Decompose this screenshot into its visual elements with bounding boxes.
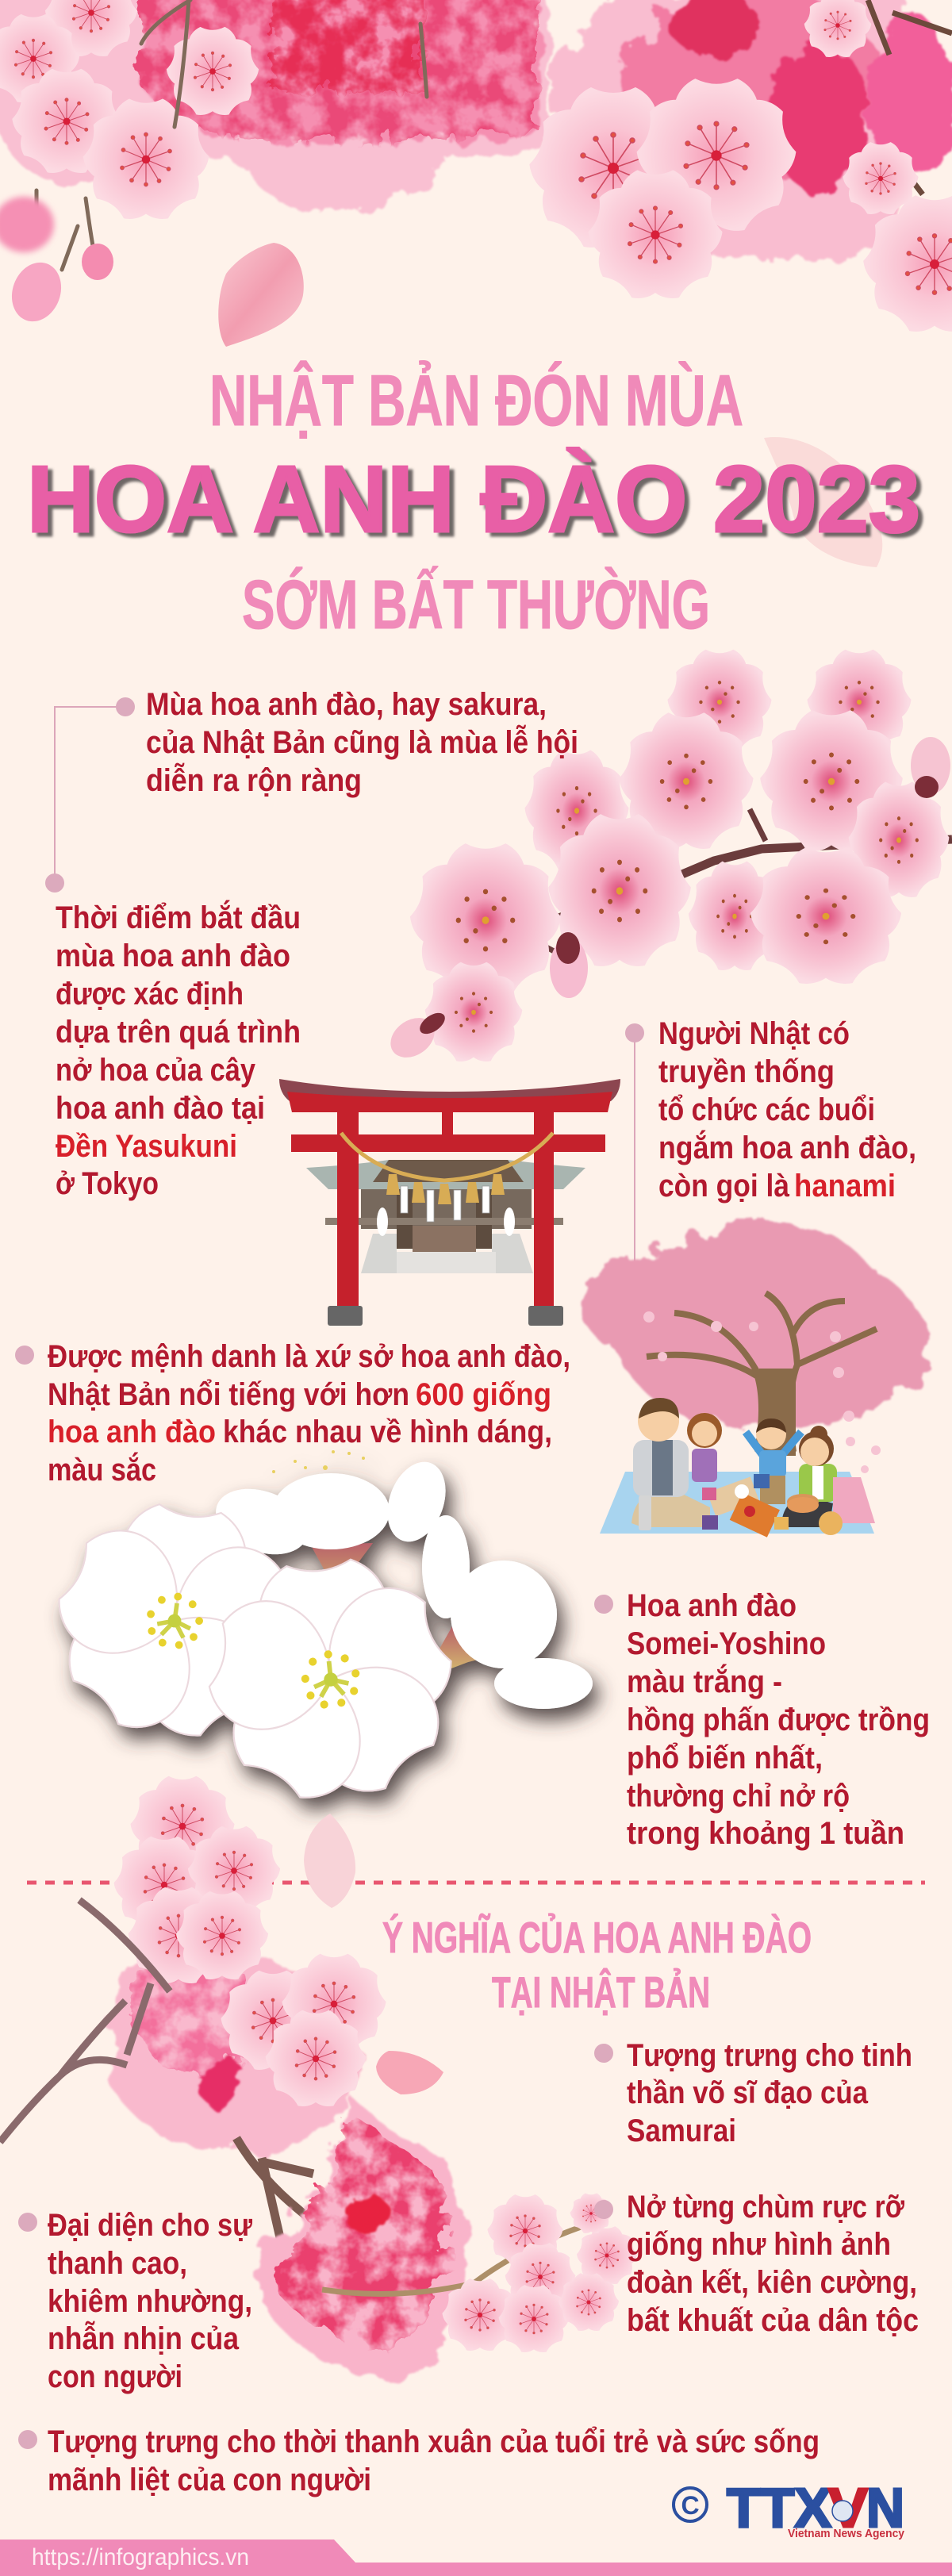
paragraph: trong khoảng 1 tuần: [627, 1816, 904, 1851]
copyright mark: [674, 2488, 707, 2521]
paragraph: Đại diện cho sự: [48, 2208, 252, 2243]
text block: how the start date is determined: nở hoa của cây: [56, 1053, 256, 1088]
text block: how the start date is determined: mùa hoa anh đào: [56, 939, 290, 973]
paragraph: thần võ sĩ đạo của: [627, 2075, 869, 2110]
sacred rope: [341, 1133, 553, 1181]
bullet: [594, 1595, 613, 1614]
illustration: lower watercolor cherry branch: [0, 1776, 639, 2380]
paragraph: Mùa hoa anh đào, hay sakura,: [146, 687, 547, 722]
text block: purity and humility: [18, 2208, 252, 2394]
text block: hanami tradition: [625, 1016, 916, 1261]
paragraph: thường chỉ nở rộ: [627, 1779, 850, 1814]
paragraph: Tượng trưng cho tinh: [627, 2038, 912, 2073]
paragraph: diễn ra rộn ràng: [146, 762, 362, 798]
paragraph: thanh cao,: [48, 2246, 187, 2281]
woman: [781, 1426, 837, 1527]
torii strut and second beam: [442, 1111, 453, 1135]
copyright mark: C: [681, 2491, 700, 2520]
bullet: [594, 2200, 613, 2219]
section heading: meaning of cherry blossoms: TẠI NHẬT BẢN: [492, 1968, 710, 2017]
right blossom: [422, 1515, 593, 1709]
stray stamens: [272, 1450, 365, 1473]
footer url: https://infographics.vn: [32, 2544, 249, 2570]
illustration: hanami tree and family picnic: [579, 1218, 928, 1538]
upper blossoms mass: [104, 1776, 390, 2153]
text block: sakura season with connector: [45, 687, 578, 893]
icon: petal near meaning heading: [376, 2051, 443, 2094]
paragraph: của Nhật Bản cũng là mùa lễ hội: [146, 724, 578, 760]
paragraph: Hoa anh đào: [627, 1588, 797, 1623]
icon: pale petal behind title: [764, 437, 882, 567]
paragraph: Nhật Bản nổi tiếng với hơn: [48, 1377, 409, 1412]
title: [27, 360, 920, 643]
text block: over 600 varieties: [15, 1339, 570, 1488]
paragraph: Người Nhật có: [658, 1016, 850, 1051]
text block: how the start date is determined: hoa anh đào tại: [56, 1091, 265, 1126]
paragraph: Nở từng chùm rực rỡ: [627, 2190, 904, 2225]
agency name: Vietnam News Agency: [788, 2527, 905, 2540]
paragraph: ngắm hoa anh đào,: [658, 1129, 916, 1165]
paragraph: bất khuất của dân tộc: [627, 2303, 919, 2338]
torii top lintel: [279, 1079, 620, 1101]
pink bag: [833, 1477, 875, 1523]
illustration: white Somei-Yoshino blossoms: [31, 1450, 593, 1825]
paragraph: con người: [48, 2359, 182, 2394]
paragraph: phổ biến nhất,: [627, 1741, 823, 1776]
globe: [832, 2501, 853, 2521]
paragraph: Samurai: [627, 2113, 736, 2148]
illustration: top-left watercolor blossoms: [0, 0, 551, 328]
bullet: [45, 873, 64, 893]
text block: samurai spirit: [594, 2038, 912, 2148]
title line 1: NHẬT BẢN ĐÓN MÙA: [209, 360, 743, 441]
text block: how the start date is determined: được xác định: [56, 977, 244, 1012]
paragraph: truyền thống: [658, 1054, 835, 1089]
wordmark: TTX: [727, 2477, 831, 2539]
paragraph: còn gọi là: [658, 1169, 790, 1204]
shrine: [306, 1160, 585, 1273]
bullet: [594, 2044, 613, 2063]
boy: [746, 1419, 801, 1504]
section heading: meaning of cherry blossoms: [382, 1913, 812, 2017]
bullet: [15, 1346, 34, 1365]
paragraph: màu trắng -: [627, 1663, 782, 1699]
footer band: [0, 2540, 952, 2576]
picnic food: [639, 1474, 843, 1538]
logo: TTXVN: [674, 2477, 905, 2540]
wordmark: V: [828, 2477, 868, 2539]
bullet: [625, 1023, 644, 1042]
paragraph: đoàn kết, kiên cường,: [627, 2265, 917, 2300]
connector line: [55, 707, 125, 883]
illustration: torii gate and shrine: [279, 1079, 620, 1326]
centre blossom: [188, 1549, 475, 1825]
title line 2: HOA ANH ĐÀO 2023: [27, 447, 920, 552]
paragraph: khác nhau về hình dáng,: [223, 1415, 552, 1449]
torii base: [328, 1306, 363, 1326]
text block: Somei-Yoshino: [594, 1588, 930, 1851]
paragraph: mãnh liệt của con người: [48, 2463, 371, 2497]
picnic blanket: [600, 1472, 874, 1534]
text block: how the start date is determined: dựa trên quá trình: [56, 1015, 301, 1050]
bullet: [18, 2430, 37, 2449]
text block: how the start date is determined: ở Tokyo: [56, 1166, 159, 1201]
paragraph: hanami: [794, 1169, 896, 1204]
girl: [687, 1413, 722, 1482]
top blossom: [207, 1454, 456, 1607]
man: [631, 1398, 710, 1527]
text block: how the start date is determined: Đền Yasukuni: [56, 1129, 237, 1164]
tree canopy: [579, 1218, 928, 1428]
tree trunk and branches: [647, 1293, 877, 1452]
small blossoms: [643, 1311, 881, 1473]
paragraph: hoa anh đào: [48, 1415, 216, 1449]
paragraph: 600 giống: [416, 1377, 551, 1412]
paragraph: nhẫn nhịn của: [48, 2320, 240, 2356]
wordmark: N: [866, 2477, 904, 2539]
icon: falling petal top: [218, 243, 304, 347]
text block: youth and vitality: [18, 2424, 820, 2497]
paragraph: Somei-Yoshino: [627, 1626, 826, 1661]
text block: how the start date is determined: Thời điểm bắt đầu: [56, 899, 301, 935]
paragraph: giống như hình ảnh: [627, 2227, 891, 2262]
icon: pale petal near divider: [304, 1814, 355, 1908]
illustration: photographic cherry branch: [383, 650, 952, 1069]
paragraph: khiêm nhường,: [48, 2284, 252, 2319]
left blossom: [31, 1491, 316, 1765]
paragraph: màu sắc: [48, 1451, 156, 1488]
paragraph: Được mệnh danh là xứ sở hoa anh đào,: [48, 1339, 570, 1374]
title line 3: SỚM BẤT THƯỜNG: [242, 566, 710, 643]
branches: [0, 1900, 170, 2142]
connector line: [634, 1033, 635, 1261]
text block: national unity: [594, 2190, 919, 2338]
illustration: top-right watercolor blossoms: [523, 0, 952, 342]
paragraph: Tượng trưng cho thời thanh xuân của tuổi trẻ và sức sống: [48, 2424, 820, 2459]
paragraph: tổ chức các buổi: [658, 1092, 875, 1127]
lower blossoms mass: [259, 2094, 470, 2380]
bullet: [18, 2213, 37, 2232]
torii pillars: [337, 1107, 359, 1309]
bullet: [116, 697, 135, 716]
